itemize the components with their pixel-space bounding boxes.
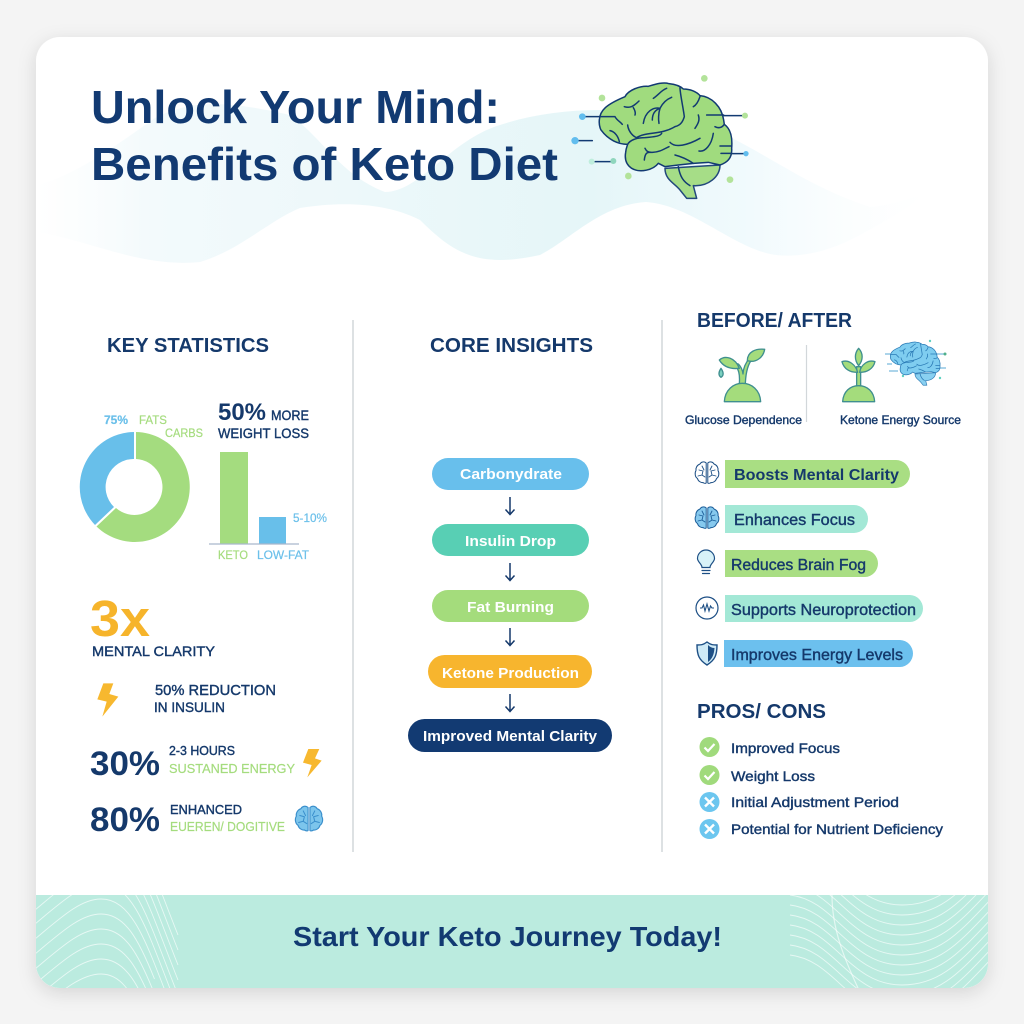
heading: pros/cons: PROS/ CONS (697, 701, 826, 723)
donut chart: FATS (139, 413, 167, 427)
weight loss headline: MORE (271, 407, 309, 423)
benefit: supports neuroprotection (696, 595, 923, 622)
arrow (506, 497, 514, 514)
panel: key statistics (80, 335, 327, 839)
weight loss headline (218, 399, 309, 441)
panel: before and after (685, 310, 961, 427)
arrow (506, 563, 514, 580)
icon: plant sprout (842, 348, 875, 402)
benefit: reduces brain fog (698, 550, 878, 577)
donut chart (80, 413, 203, 542)
label: glucose dependence: Glucose Dependence (685, 413, 802, 427)
benefit: enhances focus (695, 505, 868, 533)
stat: insulin reduction (154, 683, 276, 715)
stat: 80% enhanced cognitive (90, 801, 285, 839)
benefit: boosts mental clarity: Boosts Mental Clarity (734, 467, 899, 484)
arrow (506, 628, 514, 646)
label: ketone energy source: Ketone Energy Source (840, 413, 961, 427)
con: initial adjustment period (700, 792, 899, 812)
title: Benefits of Keto Diet (91, 138, 558, 190)
icon: blue brain with nodes (885, 340, 946, 385)
heading: core insights: CORE INSIGHTS (430, 335, 593, 357)
flow step: carbonydrate: Carbonydrate (460, 466, 562, 483)
title: Unlock Your Mind: (91, 81, 500, 133)
flow step: fat burning (432, 590, 589, 622)
heading: key statistics: KEY STATISTICS (107, 335, 269, 357)
stat: 30% sustained energy: 2-3 HOURS (169, 744, 235, 758)
flow step: insulin drop: Insulin Drop (465, 533, 556, 550)
stat: 30% sustained energy: SUSTANED ENERGY (169, 761, 295, 776)
icon: plant with drop (719, 349, 765, 402)
icon: brain illustration (571, 75, 749, 198)
stat: 80% enhanced cognitive: EUEREN/ DOGITIVE (170, 819, 285, 834)
benefit: reduces brain fog: Reduces Brain Fog (731, 557, 866, 574)
title (91, 81, 558, 190)
flow step: ketone production: Ketone Production (442, 665, 579, 682)
flow step: ketone production (428, 655, 592, 688)
flow step: fat burning: Fat Burning (467, 599, 554, 616)
icon: lightning bolt (97, 683, 118, 717)
bar chart (209, 452, 327, 562)
benefit: improves energy levels (697, 640, 913, 667)
panel: benefits list (695, 460, 923, 667)
flow step: improved mental clarity (408, 719, 612, 752)
con: potential for nutrient deficiency (700, 819, 943, 839)
bar chart: KETO (218, 548, 248, 562)
stat: 30% sustained energy (90, 744, 295, 783)
stat: 3x mental clarity: 3x (90, 590, 150, 647)
pro: weight loss (700, 765, 815, 785)
arrow (506, 694, 514, 712)
flow step: insulin drop (432, 524, 589, 556)
footer banner (36, 895, 988, 988)
stat: 80% enhanced cognitive: ENHANCED (170, 802, 242, 817)
con: potential for nutrient deficiency: Potential for Nutrient Deficiency (731, 821, 943, 837)
bar chart: 5-10% (293, 511, 327, 525)
donut chart: CARBS (165, 426, 203, 440)
heading: before/after: BEFORE/ AFTER (697, 310, 853, 332)
panel: pros and cons (697, 701, 943, 839)
stat: 80% enhanced cognitive: 80% (90, 801, 160, 839)
benefit: supports neuroprotection: Supports Neuroprotection (731, 602, 916, 619)
call to action text: Start Your Keto Journey Today! (293, 921, 722, 952)
weight loss headline: WEIGHT LOSS (218, 425, 309, 441)
icon: lightning bolt small (303, 749, 322, 777)
weight loss headline: 50% (218, 399, 266, 426)
benefit: enhances focus: Enhances Focus (734, 512, 855, 529)
flow step: improved mental clarity: Improved Mental Clarity (423, 728, 598, 745)
pro: improved focus (700, 737, 840, 757)
stat: insulin reduction: IN INSULIN (154, 700, 225, 715)
donut chart: 75% (104, 413, 128, 427)
stat: 3x mental clarity: MENTAL CLARITY (92, 643, 216, 659)
stat: 3x mental clarity (90, 590, 216, 659)
pro: improved focus: Improved Focus (731, 740, 840, 756)
bar chart: LOW-FAT (257, 548, 310, 562)
icon: blue brain (295, 806, 323, 831)
flow step: carbonydrate (432, 458, 589, 490)
header wave background (36, 104, 930, 263)
pro: weight loss: Weight Loss (731, 768, 815, 784)
benefit: improves energy levels: Improves Energy Levels (731, 647, 903, 664)
stat: 30% sustained energy: 30% (90, 745, 160, 783)
benefit: boosts mental clarity (695, 460, 910, 488)
stat: insulin reduction: 50% REDUCTION (155, 683, 276, 699)
panel: core insights (408, 335, 612, 752)
con: initial adjustment period: Initial Adjustment Period (731, 794, 899, 810)
